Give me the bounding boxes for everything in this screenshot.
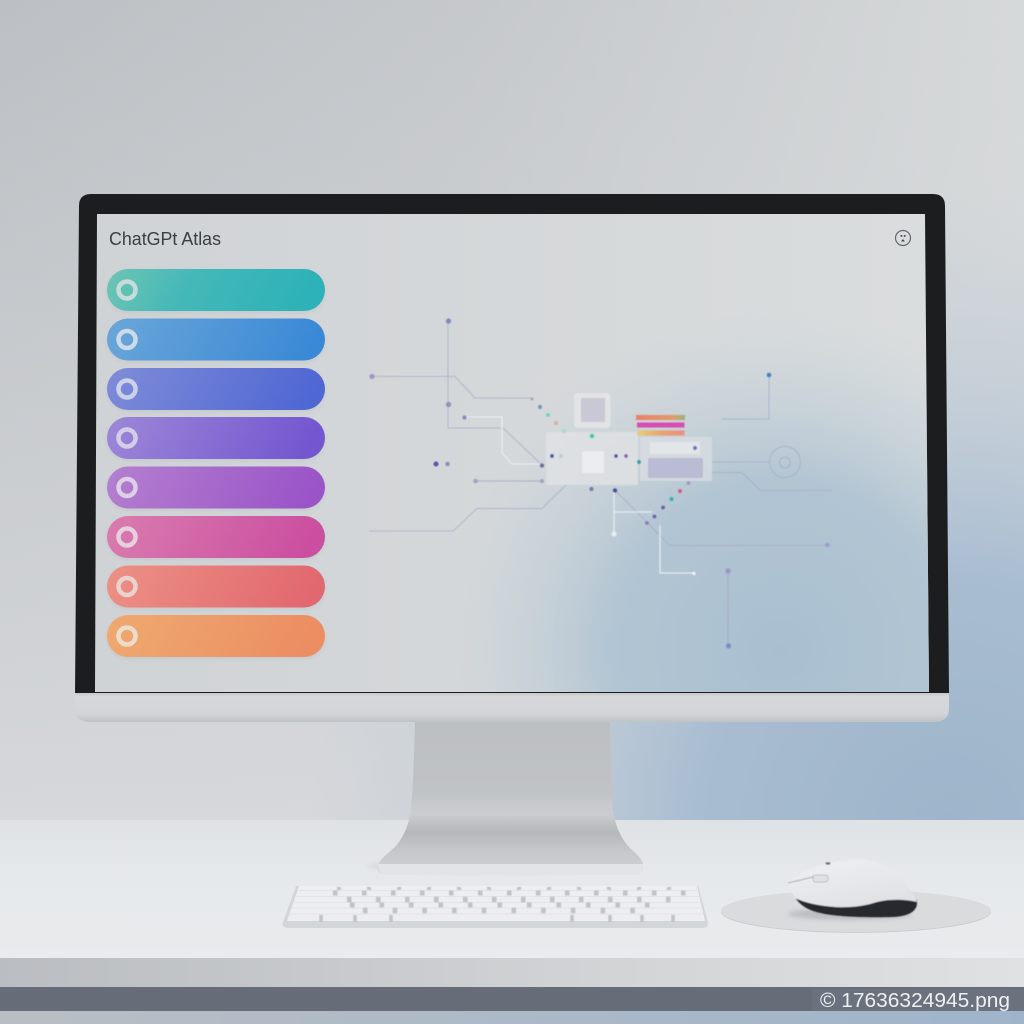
- monitor bezel: [75, 194, 949, 694]
- keys: [321, 888, 690, 922]
- pill 1: [107, 269, 325, 313]
- pill 2: [107, 318, 325, 362]
- white connector lines: [464, 417, 694, 573]
- mouse pad: [721, 890, 991, 933]
- center square: [582, 451, 604, 474]
- monitor stand: [367, 722, 643, 875]
- pill 8: [107, 615, 325, 659]
- panel: colored pill list: [107, 269, 325, 659]
- top icon tile: [574, 393, 610, 428]
- node dots: [369, 318, 830, 648]
- pill 3: [107, 368, 325, 412]
- connector lines: [369, 321, 831, 645]
- screen: [95, 214, 929, 692]
- title: ChatGPt Atlas: [109, 228, 221, 249]
- pill 5: [107, 466, 325, 510]
- pill 6: [107, 516, 325, 560]
- colored bars: [636, 415, 685, 436]
- monitor: [75, 194, 949, 722]
- icon: face: [896, 230, 910, 246]
- central card: [546, 432, 638, 485]
- desk: [0, 820, 1024, 1024]
- pill 7: [107, 566, 325, 610]
- mouse: [788, 860, 917, 920]
- network diagram: [369, 318, 831, 648]
- monitor chin: [75, 693, 949, 722]
- key rows: [289, 890, 704, 914]
- watermark: © 17636324945.png: [820, 989, 1010, 1012]
- right card: [640, 437, 712, 481]
- keyboard: [283, 886, 708, 928]
- pill 4: [107, 417, 325, 461]
